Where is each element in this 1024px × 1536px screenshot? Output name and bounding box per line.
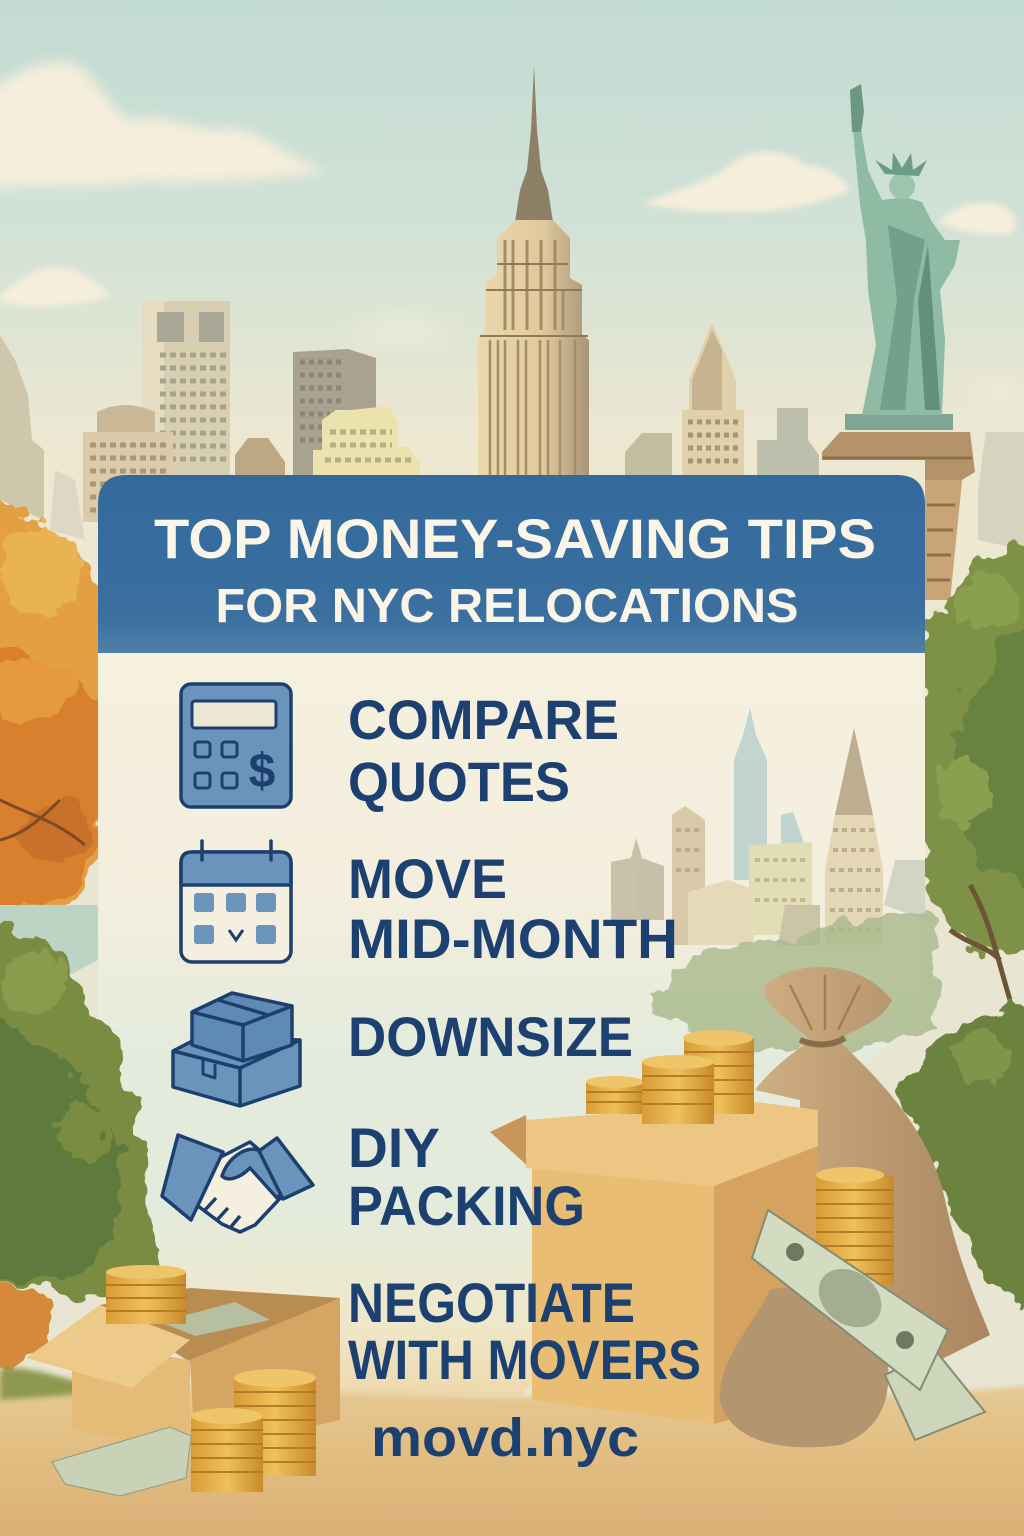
tip: diy packing: DIY	[348, 1116, 440, 1179]
website url: movd.nyc	[371, 1408, 639, 1468]
building: tall tan tower	[142, 301, 230, 476]
big cardboard box	[490, 1102, 818, 1424]
icon: stacked boxes	[173, 993, 300, 1106]
money sack small	[720, 1287, 889, 1447]
tree: autumn low left	[0, 1284, 51, 1370]
banknotes right	[752, 1210, 985, 1440]
skyline buildings	[0, 66, 1024, 550]
tree: green right	[915, 540, 1024, 956]
tip: move mid-month	[348, 847, 678, 970]
coin stack right	[816, 1167, 894, 1285]
building: far left	[0, 335, 44, 520]
icon: calculator	[181, 684, 291, 807]
tip: move mid-month: MID-MONTH	[348, 907, 678, 970]
panel body	[98, 640, 925, 1395]
building: Empire State	[478, 66, 589, 475]
tree: green left	[0, 925, 158, 1293]
coin stacks on box	[586, 1030, 754, 1124]
tip: move mid-month: MOVE	[348, 847, 507, 910]
header band	[98, 475, 925, 653]
panel inner scene: hazy skyline	[611, 708, 925, 945]
building: low rotunda	[83, 405, 173, 522]
money sack large	[755, 967, 990, 1360]
tip: compare quotes: QUOTES	[348, 750, 570, 813]
title	[154, 507, 876, 633]
main panel	[98, 475, 935, 1395]
tip: compare quotes	[348, 688, 619, 813]
banknote left	[52, 1427, 191, 1496]
foreground trees	[0, 925, 1024, 1370]
tip: negotiate with movers: WITH MOVERS	[348, 1328, 701, 1391]
clouds	[0, 62, 1024, 403]
icon: calendar	[181, 841, 291, 962]
trees behind panel	[0, 490, 1024, 1000]
tips list	[348, 688, 701, 1391]
tip: diy packing	[348, 1116, 585, 1237]
cardboard box left	[26, 1265, 340, 1452]
building: pointed tower	[682, 322, 744, 475]
building: small right	[625, 433, 672, 475]
tip: negotiate with movers: NEGOTIATE	[348, 1271, 635, 1334]
tip: diy packing: PACKING	[348, 1174, 585, 1237]
coin stack: in box	[106, 1265, 186, 1324]
building: small brown	[235, 438, 285, 475]
icon: calculator: $	[249, 745, 276, 798]
tip: negotiate with movers	[348, 1271, 701, 1391]
title line 2: FOR NYC RELOCATIONS	[216, 579, 798, 633]
tree: green low right	[901, 1004, 1024, 1320]
ground	[0, 1375, 1024, 1536]
tree: autumn left	[0, 490, 111, 921]
building: cream stepped	[313, 406, 420, 475]
pedestal: Statue of Liberty base	[822, 414, 975, 600]
icon: handshake	[162, 1135, 313, 1232]
building: dark grey block	[293, 349, 376, 475]
tip: downsize: DOWNSIZE	[348, 1005, 633, 1068]
panel inner scene: hazy trees	[650, 913, 935, 1050]
title line 1: TOP MONEY-SAVING TIPS	[154, 507, 876, 570]
river hint	[0, 905, 98, 980]
coin stacks left	[191, 1369, 316, 1492]
tip: compare quotes: COMPARE	[348, 688, 619, 751]
statue of Liberty	[850, 84, 960, 415]
